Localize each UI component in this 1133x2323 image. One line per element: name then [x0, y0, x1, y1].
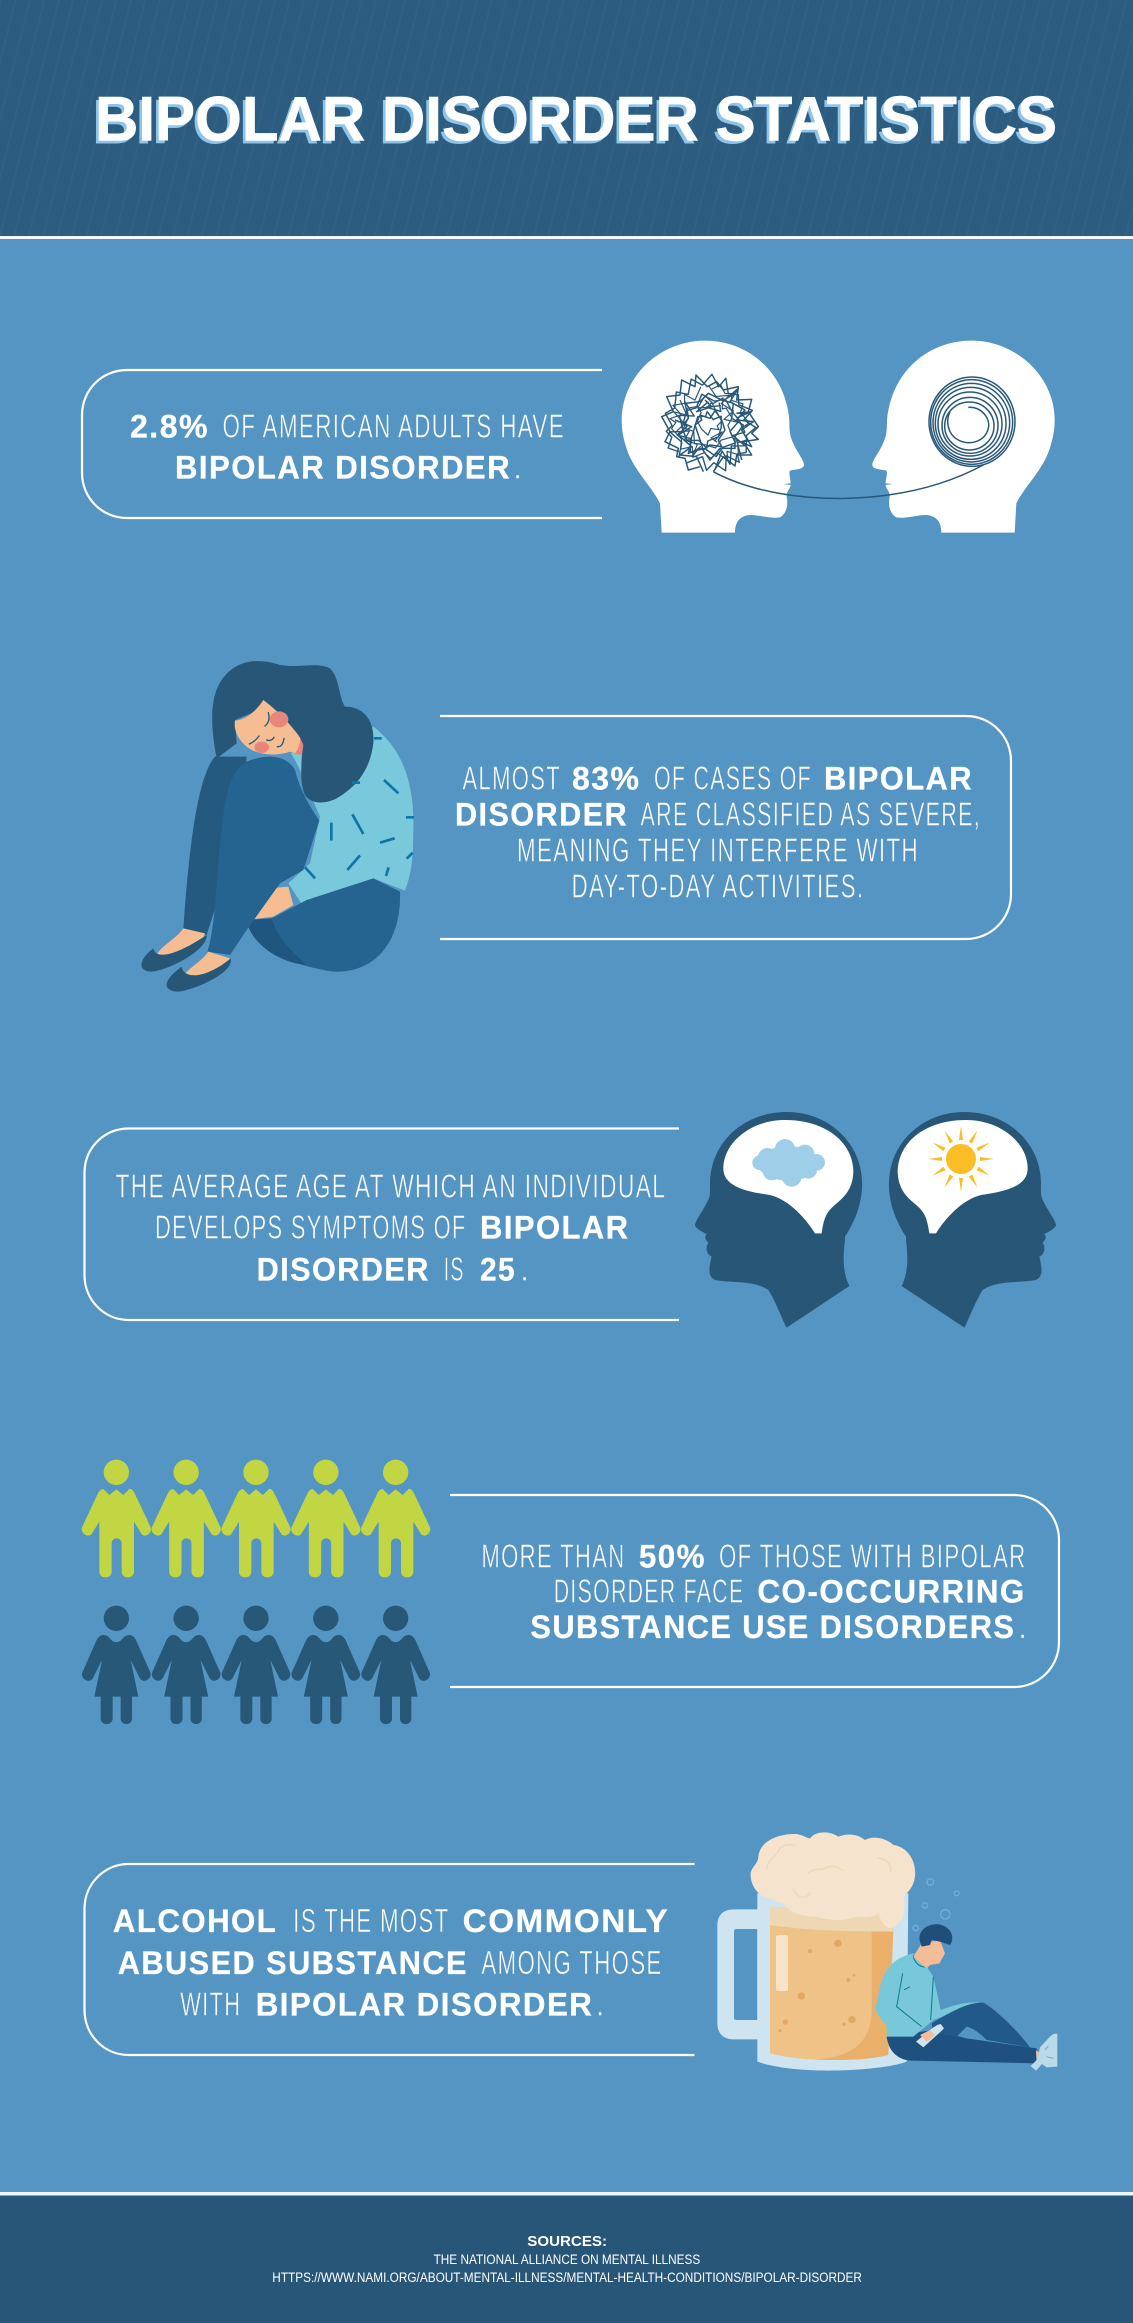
panel: alcohol statistic [84, 1864, 694, 2055]
panel: alcohol statistic: ABUSED SUBSTANCE [118, 1945, 468, 1981]
panel: 83% statistic: ALMOST [462, 759, 561, 796]
title: BIPOLAR DISORDER STATISTICS [92, 88, 1054, 158]
panel: alcohol statistic: BIPOLAR DISORDER [256, 1987, 593, 2023]
panel: 2.8% statistic: 2.8% [130, 408, 209, 444]
footer band [0, 2192, 1133, 2323]
panel: average age statistic: . [520, 1251, 531, 1288]
panel: 2.8% statistic: OF AMERICAN ADULTS HAVE [222, 407, 565, 444]
sources text [272, 2233, 862, 2285]
panel: average age statistic: THE AVERAGE AGE AT WHICH AN INDIVIDUAL [116, 1167, 666, 1204]
panel: 50% statistic: . [1018, 1608, 1029, 1645]
panel: 50% statistic: SUBSTANCE USE DISORDERS [530, 1609, 1015, 1645]
header band [0, 0, 1133, 239]
panel: 2.8% statistic: BIPOLAR DISORDER [175, 449, 511, 485]
icon: two heads with tangled and spiral thread [622, 341, 1055, 533]
panel: alcohol statistic: AMONG THOSE [481, 1944, 663, 1981]
sources text: THE NATIONAL ALLIANCE ON MENTAL ILLNESS [434, 2252, 700, 2267]
panel: average age statistic: 25 [480, 1252, 516, 1288]
panel: average age statistic: BIPOLAR [480, 1210, 630, 1246]
panel: average age statistic [84, 1128, 679, 1320]
panel: average age statistic: DISORDER [257, 1252, 430, 1288]
sources text: SOURCES: [527, 2233, 607, 2250]
panel: 50% statistic: DISORDER FACE [554, 1573, 744, 1610]
panel: 83% statistic: MEANING THEY INTERFERE WITH [517, 831, 919, 868]
panel: 83% statistic: BIPOLAR [824, 760, 973, 796]
panel: 83% statistic: 83% [572, 760, 640, 796]
panel: 50% statistic [450, 1495, 1059, 1687]
panel: alcohol statistic: IS THE MOST [293, 1902, 450, 1939]
panel: 2.8% statistic [82, 370, 602, 518]
icon: row of five green men and row of five dark women [82, 1460, 430, 1724]
panel: 83% statistic: OF CASES OF [654, 759, 812, 796]
panel: 50% statistic: MORE THAN [481, 1537, 626, 1574]
sources text: HTTPS://WWW.NAMI.ORG/ABOUT-MENTAL-ILLNESS/MENTAL-HEALTH-CONDITIONS/BIPOLAR-DISORDER [272, 2270, 862, 2285]
panel: alcohol statistic: ALCOHOL [113, 1903, 277, 1939]
panel: average age statistic: IS [444, 1251, 465, 1288]
illustration: sad woman hugging knees [142, 661, 414, 992]
illustration: man leaning on beer mug [717, 1832, 1057, 2071]
title: BIPOLAR DISORDER STATISTICS [95, 84, 1057, 154]
icon: heads with cloud and sun [695, 1112, 1056, 1328]
panel: 2.8% statistic: . [513, 448, 524, 485]
panel: 83% statistic [440, 716, 1011, 939]
panel: alcohol statistic: . [596, 1986, 607, 2023]
panel: 83% statistic: DISORDER [455, 796, 628, 832]
panel: average age statistic: DEVELOPS SYMPTOMS OF [155, 1209, 467, 1246]
panel: 50% statistic: CO-OCCURRING [757, 1574, 1026, 1610]
panel: alcohol statistic: WITH [180, 1986, 241, 2023]
panel: 83% statistic: DAY-TO-DAY ACTIVITIES. [572, 868, 864, 905]
panel: alcohol statistic: COMMONLY [463, 1903, 669, 1939]
panel: 50% statistic: 50% [639, 1538, 706, 1574]
